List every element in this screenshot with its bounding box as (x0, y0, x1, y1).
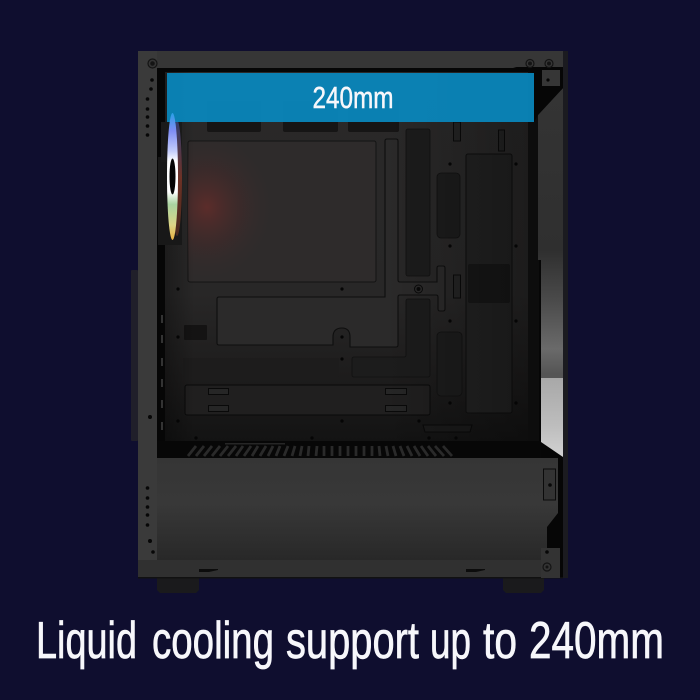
top right black corner (513, 67, 563, 122)
fan ring (167, 113, 178, 240)
drive bay outline (466, 154, 512, 413)
fan frame (158, 120, 182, 245)
tray holes (176, 162, 518, 440)
side glass upper (538, 88, 563, 378)
caption: support (286, 612, 419, 670)
motherboard cutout (188, 141, 376, 282)
bottom strip (138, 560, 560, 578)
PSU shroud (157, 458, 558, 560)
oblong holes (454, 122, 504, 298)
caption: 240mm (529, 612, 664, 670)
dark column right of tray (528, 68, 539, 457)
shroud vent latch (544, 469, 556, 500)
raised outline shape (217, 139, 445, 347)
caption: Liquid (36, 612, 137, 670)
pillar notches (161, 315, 163, 430)
caption (36, 612, 664, 670)
RGB fan (167, 113, 178, 240)
bottom slits (199, 569, 485, 572)
bottom right bracket (541, 548, 560, 578)
caption: to (483, 612, 517, 670)
top frame (138, 51, 563, 68)
240mm highlight bar (167, 73, 534, 122)
side glass lower (541, 378, 563, 457)
top slots (207, 101, 399, 132)
top left screw (148, 59, 157, 68)
bar label: 240mm (312, 81, 394, 115)
top right bracket (542, 70, 560, 86)
right edge strip (563, 51, 568, 578)
motherboard tray (165, 72, 530, 441)
pillar holes (146, 78, 155, 566)
floor vents (157, 441, 541, 458)
case interior backing (138, 51, 568, 578)
left side protrusion (131, 270, 138, 441)
fan hub (170, 158, 176, 194)
PC case (131, 51, 568, 593)
left pillar (138, 51, 157, 578)
caption: cooling (152, 612, 274, 670)
caption: up (430, 612, 471, 670)
case feet (157, 578, 544, 593)
cable slots (352, 129, 462, 396)
lower bracket panel (185, 385, 430, 415)
bottom bracket (423, 425, 472, 432)
standoff (414, 285, 422, 293)
top right screws (526, 60, 553, 68)
lower slots (183, 325, 339, 377)
tray shading (165, 72, 530, 441)
